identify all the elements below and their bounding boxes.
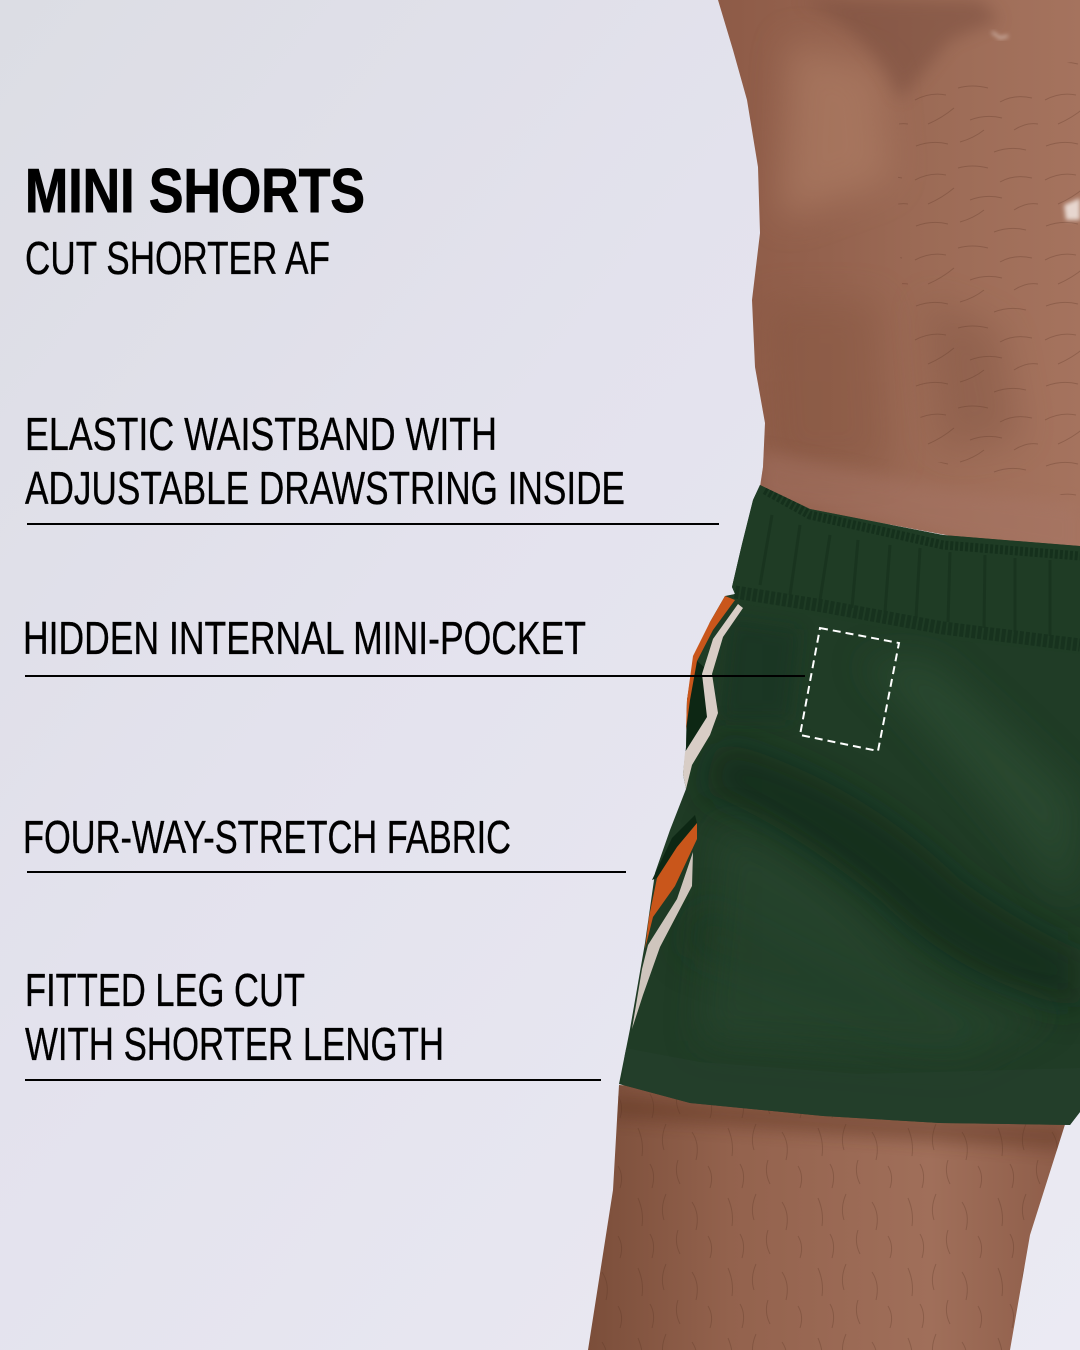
lower orange stripe — [645, 823, 697, 949]
feature: fitted leg cut — [25, 964, 601, 1081]
feature: elastic waistband: ADJUSTABLE DRAWSTRING INSIDE — [25, 462, 625, 514]
shorts body — [610, 480, 1080, 1130]
waistband lower elastic — [735, 592, 1080, 645]
photo: leg — [580, 1080, 1080, 1350]
pocket outline: dashed mini-pocket — [800, 628, 899, 751]
waistband top elastic — [765, 490, 1080, 556]
title: MINI SHORTS — [25, 157, 365, 226]
waistband — [732, 485, 1078, 594]
feature: fitted leg cut: WITH SHORTER LENGTH — [25, 1018, 444, 1070]
hem band — [619, 1048, 1080, 1125]
feature: elastic waistband: ELASTIC WAISTBAND WITH — [25, 408, 497, 460]
dark gap above lower stripes — [652, 815, 697, 880]
photo: green mini shorts — [610, 480, 1080, 1130]
upper orange stripe — [686, 596, 735, 730]
waistband gathers — [760, 515, 1050, 636]
feature: stretch fabric: FOUR-WAY-STRETCH FABRIC — [23, 811, 511, 863]
feature: hidden pocket: HIDDEN INTERNAL MINI-POCKET — [23, 612, 586, 664]
gap behind upper stripes — [686, 661, 718, 760]
lower white stripe — [632, 852, 693, 1029]
subtitle: CUT SHORTER AF — [25, 232, 330, 284]
feature: fitted leg cut: FITTED LEG CUT — [25, 964, 305, 1016]
upper white stripe — [683, 604, 743, 789]
fabric folds — [707, 676, 1076, 1008]
feature: elastic waistband — [25, 408, 719, 525]
photo: torso — [700, 0, 1080, 560]
